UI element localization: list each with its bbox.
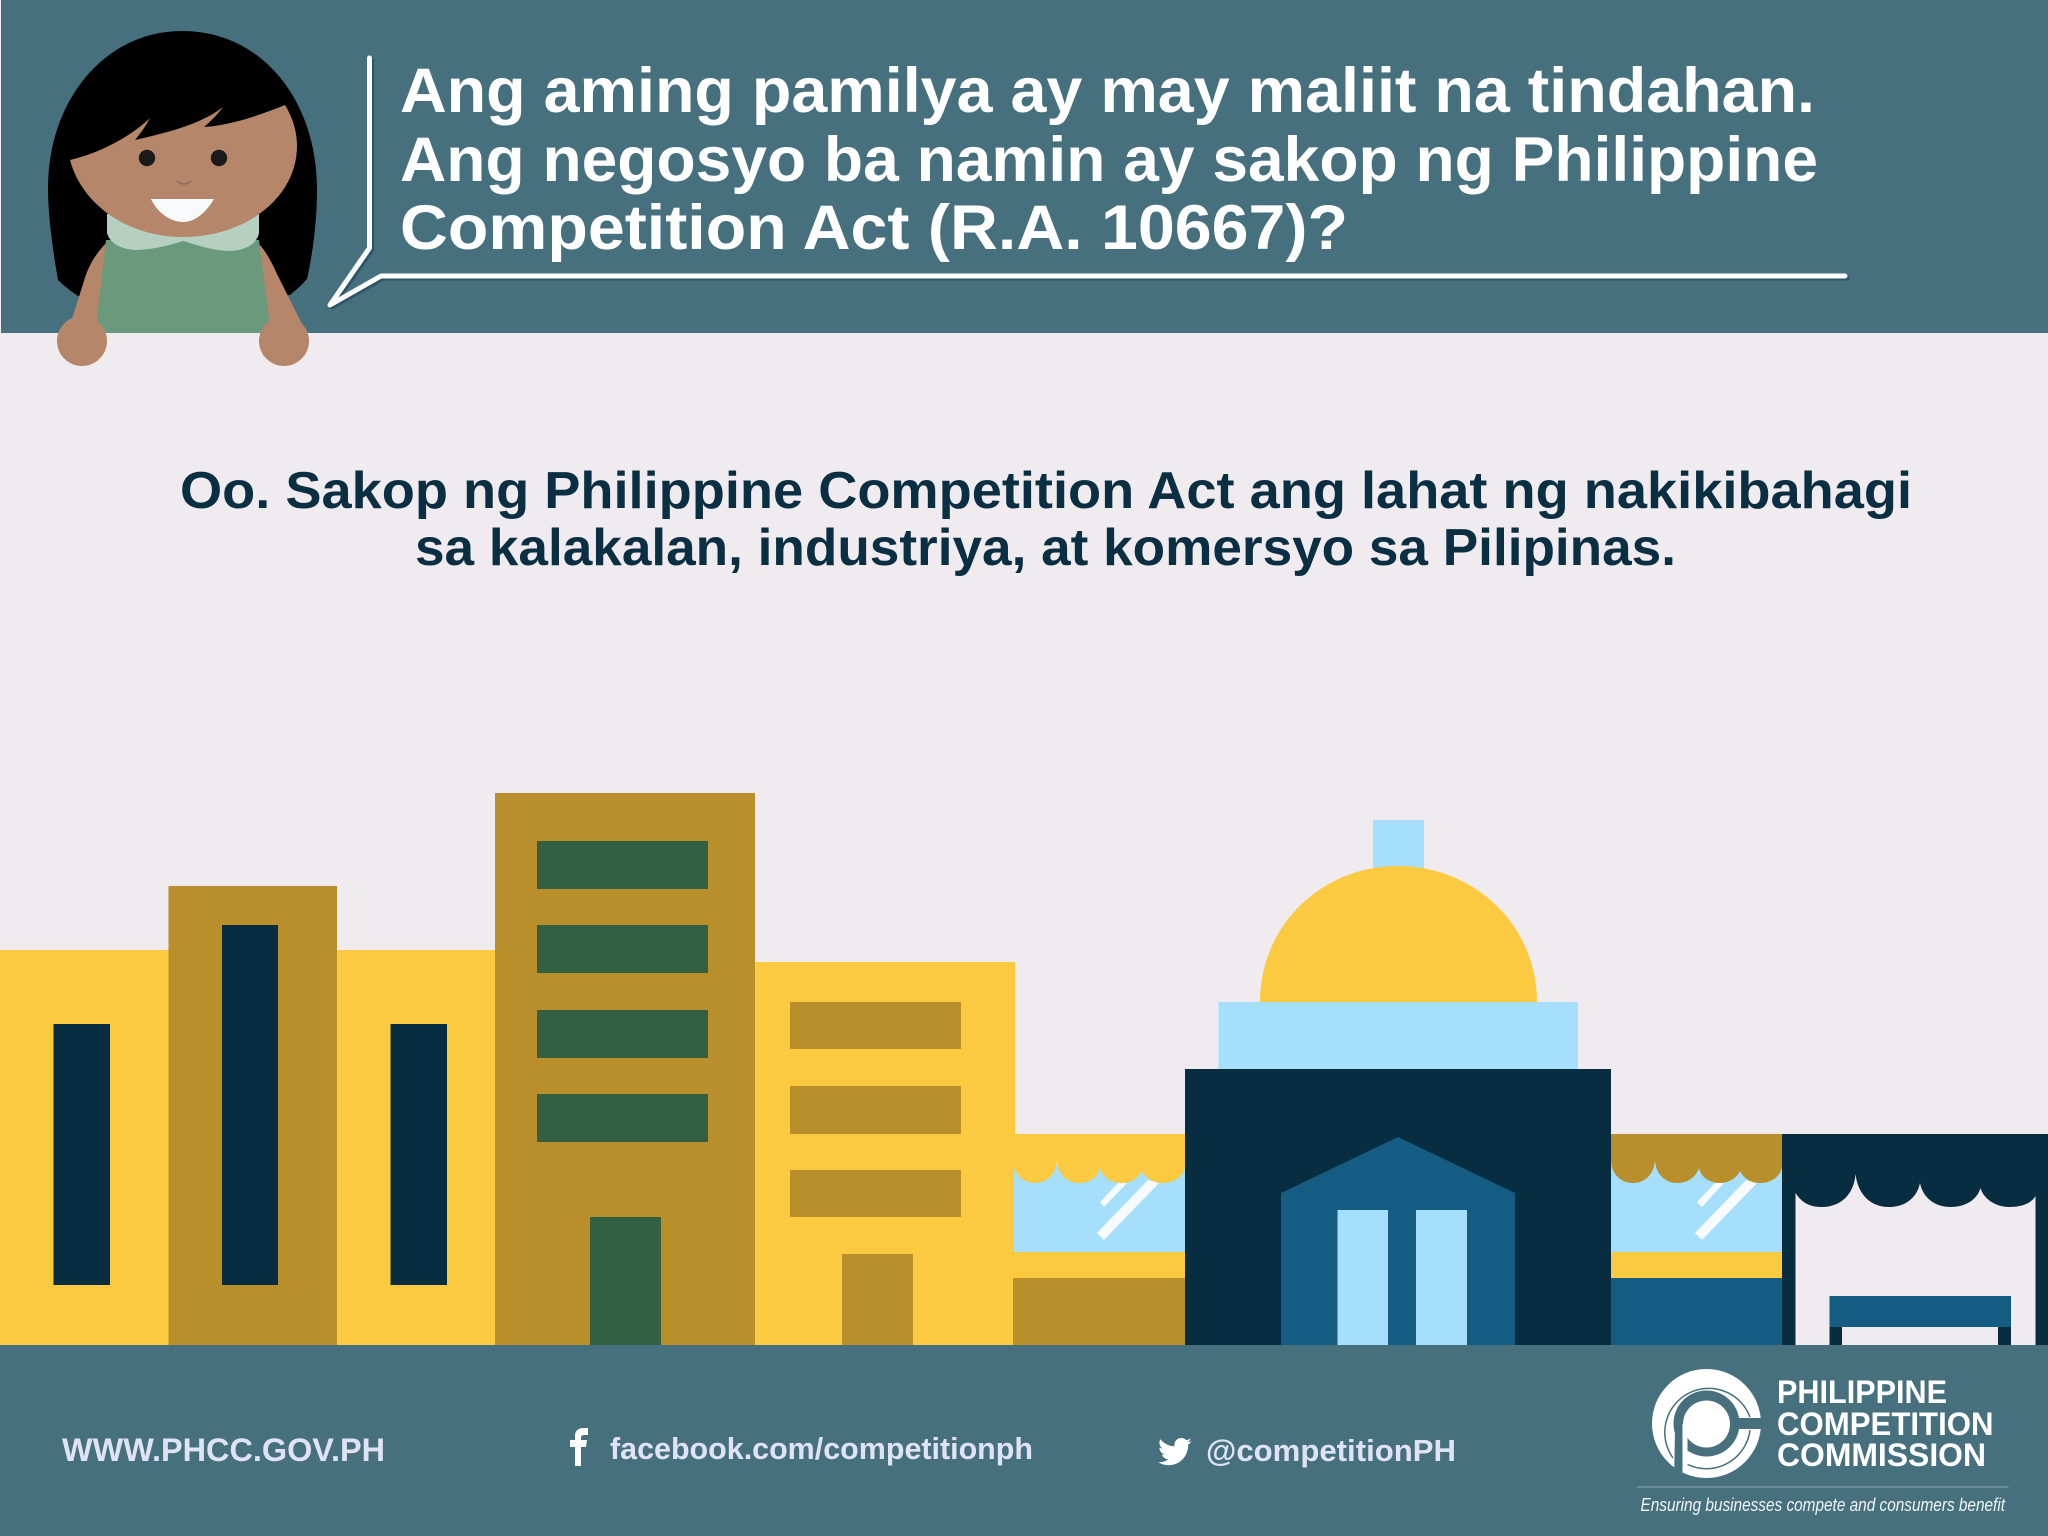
hands <box>57 316 309 366</box>
question heading: Competition Act (R.A. 10667)? <box>400 193 1348 263</box>
arms <box>71 243 303 326</box>
logo wordmark <box>1777 1374 1994 1473</box>
answer text: Oo. Sakop ng Philippine Competition Act ang lahat ng nakikibahagi <box>180 462 1912 520</box>
logo: Philippine Competition Commission <box>1637 1369 2008 1515</box>
eyes <box>139 150 227 166</box>
question heading: Ang negosyo ba namin ay sakop ng Philippine <box>400 125 1818 195</box>
hair <box>48 31 317 296</box>
nose <box>177 181 191 184</box>
icon: twitter bird <box>1158 1438 1192 1465</box>
cityscape illustration <box>0 793 2048 1345</box>
dress <box>97 240 270 333</box>
header band <box>1 0 2048 333</box>
building: yellow left block <box>0 950 495 1345</box>
building: yellow mid block <box>755 962 1015 1345</box>
icon: facebook <box>570 1428 588 1466</box>
market stall <box>1782 1134 2048 1345</box>
question heading <box>400 56 1818 263</box>
facebook handle: facebook.com/competitionph <box>610 1431 1033 1466</box>
character: girl <box>48 31 317 366</box>
answer text <box>180 462 1912 577</box>
building: domed government hall <box>1185 820 1611 1345</box>
logo wordmark: PHILIPPINE <box>1777 1374 1947 1410</box>
speech bubble outline <box>330 58 1847 307</box>
question heading: Ang aming pamilya ay may maliit na tindahan. <box>400 56 1815 126</box>
logo mark <box>1652 1369 1764 1482</box>
collar <box>107 214 259 251</box>
logo divider <box>1637 1486 2008 1488</box>
building: tan tall tower <box>495 793 755 1345</box>
shop: tan awning <box>1611 1134 1782 1345</box>
footer band <box>0 1345 2048 1536</box>
building: tan narrow tower <box>168 886 337 1345</box>
logo wordmark: COMPETITION <box>1777 1406 1994 1442</box>
logo wordmark: COMMISSION <box>1777 1437 1986 1473</box>
twitter handle: @competitionPH <box>1206 1433 1456 1468</box>
website link: WWW.PHCC.GOV.PH <box>62 1432 385 1468</box>
face <box>70 105 297 237</box>
shop: yellow awning <box>1013 1134 1185 1345</box>
answer text: sa kalakalan, industriya, at komersyo sa Pilipinas. <box>415 519 1676 577</box>
mouth <box>151 199 214 222</box>
